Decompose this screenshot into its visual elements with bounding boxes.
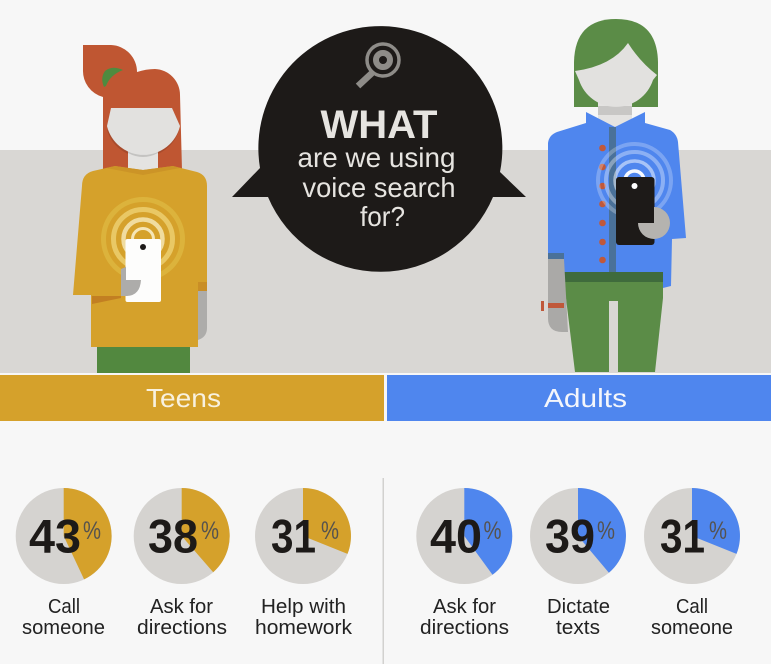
bubble title: for? — [360, 201, 405, 232]
speech bubble — [232, 26, 526, 272]
teen sleeve fold — [92, 296, 121, 304]
teen right arm — [198, 291, 207, 340]
divider — [382, 478, 384, 664]
adult hair — [574, 19, 658, 107]
grey backdrop panel — [0, 150, 771, 373]
stat: teens call someone 43%: % — [83, 517, 101, 545]
adult phone camera — [632, 183, 638, 189]
adult neck shadow — [598, 106, 632, 115]
stat: teens ask for directions 38%: directions — [137, 617, 227, 639]
adult placket — [609, 127, 616, 272]
bubble title: are we using — [298, 142, 456, 173]
stat: teens help with homework 31%: Help with — [261, 596, 346, 618]
stat: adults call someone 31% — [644, 488, 740, 639]
adult buttons — [599, 145, 606, 263]
stat: adults call someone 31%: someone — [651, 617, 733, 639]
stat: teens call someone 43% — [16, 488, 112, 639]
stat: adults ask for directions 40% — [416, 488, 512, 639]
band: teens — [0, 375, 384, 421]
stat: adults dictate texts 39%: Dictate — [547, 596, 610, 618]
teen neck shadow — [128, 148, 158, 157]
band: adults — [387, 375, 771, 421]
stat: adults call someone 31%: 31 — [660, 510, 705, 562]
stat: teens ask for directions 38%: Ask for — [150, 596, 213, 618]
teen neck — [128, 145, 158, 172]
stat: teens help with homework 31%: 31 — [271, 510, 316, 562]
bubble title: voice search — [302, 172, 456, 203]
adult signal rings — [598, 144, 671, 217]
stat: adults ask for directions 40%: Ask for — [433, 596, 496, 618]
teen phone camera — [140, 244, 146, 250]
adult watch — [541, 301, 564, 311]
stat: teens help with homework 31% — [255, 488, 353, 639]
bubble shape — [232, 26, 526, 272]
stat: adults ask for directions 40%: directions — [420, 617, 509, 639]
adult hand — [638, 207, 670, 239]
bubble title — [298, 103, 456, 232]
stat: teens ask for directions 38% — [134, 488, 230, 639]
stat: teens ask for directions 38%: 38 — [148, 510, 198, 562]
teen collar shadow — [106, 166, 180, 175]
stat: teens help with homework 31%: % — [321, 517, 339, 545]
teen pants — [97, 347, 190, 373]
stat: adults call someone 31%: Call — [676, 596, 708, 618]
stat: teens help with homework 31%: homework — [255, 617, 353, 639]
bubble title: WHAT — [320, 103, 438, 147]
stat: adults dictate texts 39%: texts — [556, 617, 600, 639]
stat: adults dictate texts 39%: % — [597, 517, 615, 545]
icon: magnifying glass — [358, 44, 399, 86]
stat: adults ask for directions 40%: % — [484, 517, 502, 545]
teen hand — [121, 267, 141, 296]
adult pants — [564, 282, 663, 372]
teen signal rings — [104, 200, 182, 278]
teen shirt — [73, 166, 207, 347]
stat: adults dictate texts 39%: 39 — [545, 510, 595, 562]
adult face — [575, 43, 657, 107]
adult left arm — [548, 259, 568, 332]
teen face — [107, 108, 180, 155]
adult black phone — [616, 177, 654, 245]
hair leaf — [102, 68, 123, 87]
adult neck — [598, 100, 632, 130]
stat: teens call someone 43%: Call — [48, 596, 80, 618]
adult figure — [541, 19, 686, 372]
face shadow on hair — [107, 130, 179, 157]
stat: adults dictate texts 39% — [530, 488, 626, 639]
band: adults: Adults — [544, 383, 627, 413]
teen white phone — [126, 239, 161, 302]
stat: adults call someone 31%: % — [709, 517, 727, 545]
stat: adults ask for directions 40%: 40 — [430, 510, 482, 562]
teen right cuff — [198, 282, 207, 291]
adult cuff — [548, 253, 564, 259]
stat: teens call someone 43%: someone — [22, 617, 105, 639]
teen figure — [73, 45, 207, 373]
stat: teens call someone 43%: 43 — [29, 510, 81, 562]
adult belt — [564, 272, 663, 282]
band: teens: Teens — [146, 383, 221, 413]
adult shirt — [548, 112, 686, 288]
teen hair and bun — [83, 45, 182, 170]
stat: teens ask for directions 38%: % — [201, 517, 219, 545]
